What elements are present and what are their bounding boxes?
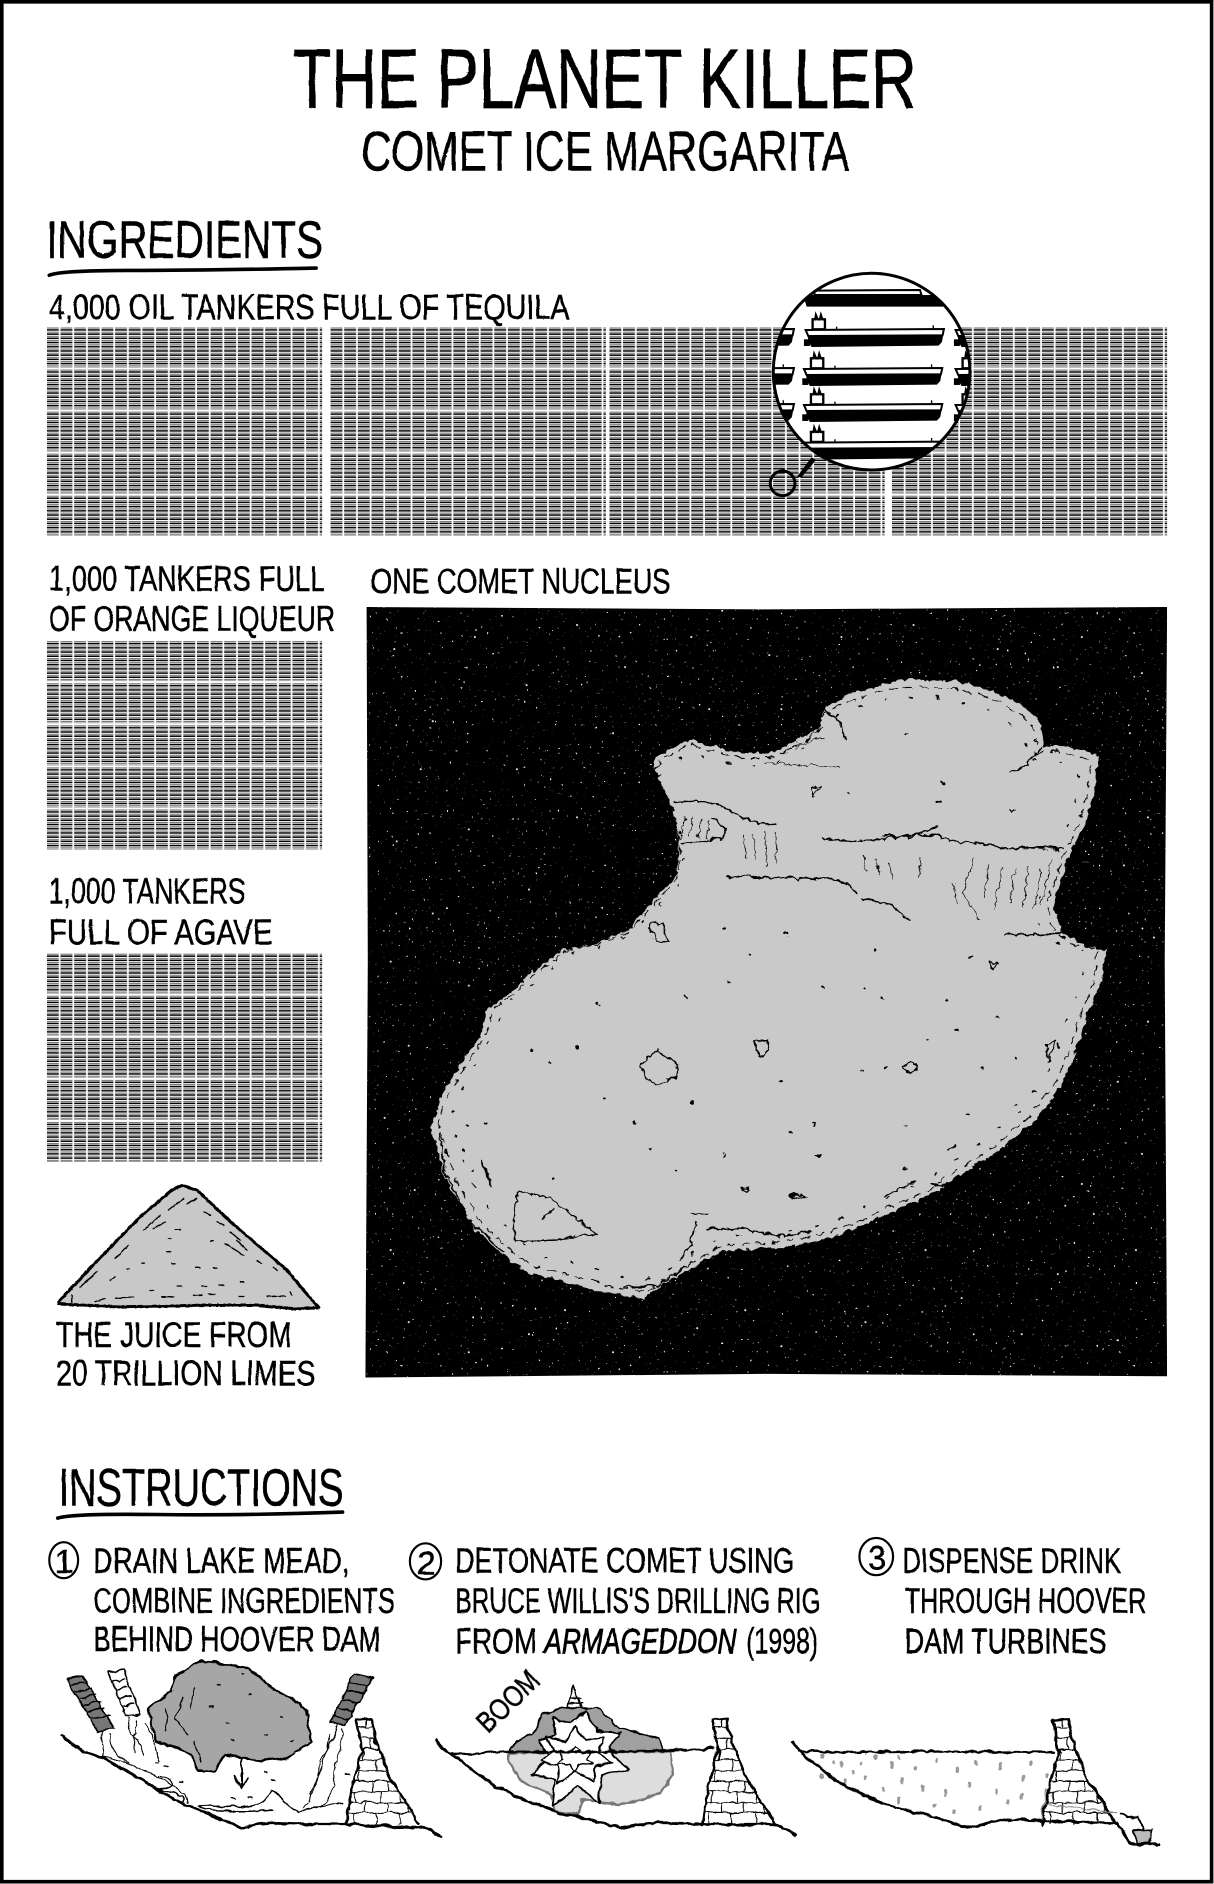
step 1 text: DRAIN LAKE MEAD, [93, 1541, 349, 1580]
step 1 text: BEHIND HOOVER DAM [93, 1619, 380, 1658]
falling comet [147, 1660, 310, 1770]
hoover dam [1037, 1717, 1123, 1823]
lake surface [797, 1750, 1053, 1751]
lake bed [435, 1740, 794, 1833]
lime juice pile [58, 1185, 318, 1309]
subtitle: COMET ICE MARGARITA [361, 119, 849, 181]
label: orange liqueur: 1,000 TANKERS FULL [48, 559, 325, 598]
step 3 text: DAM TURBINES [904, 1622, 1106, 1661]
panel: comet nucleus in space [361, 601, 1172, 1382]
step 2 text: DETONATE COMET USING [454, 1541, 793, 1580]
tanker grid: agave [47, 953, 322, 1162]
water streams [100, 1717, 341, 1808]
step 1 number: 1 [55, 1543, 73, 1579]
submerged comet [507, 1750, 672, 1813]
arrow [235, 1757, 246, 1787]
hoover dam [341, 1717, 426, 1823]
neck striations [679, 726, 1050, 917]
lens [772, 272, 972, 472]
step 2 text: FROM [454, 1622, 536, 1661]
drilling rig [565, 1685, 581, 1707]
heading: instructions: INSTRUCTIONS [58, 1458, 343, 1517]
label: agave [48, 872, 272, 952]
magnifier callout [768, 272, 972, 498]
step 3 number: 3 [867, 1540, 885, 1576]
label: agave: 1,000 TANKERS [48, 872, 245, 911]
middle pipe [108, 1668, 139, 1715]
title: THE PLANET KILLER [292, 31, 916, 125]
tanker grid: orange liqueur [47, 641, 322, 849]
water line [447, 1748, 712, 1753]
step 1 number [49, 1542, 78, 1579]
surface pits [462, 734, 1015, 1177]
surface cracks [438, 706, 1103, 1285]
left pipe [66, 1675, 112, 1730]
comet body [428, 677, 1105, 1298]
hoover dam [697, 1717, 782, 1823]
label: tequila: 4,000 OIL TANKERS FULL OF TEQUILA [48, 288, 569, 327]
water pool [155, 1762, 348, 1810]
illustration: comet detonation [435, 1685, 794, 1833]
label: lime juice: 20 TRILLION LIMES [55, 1354, 315, 1393]
label: lime juice [55, 1315, 315, 1393]
illustration: dispensing drink [791, 1717, 1157, 1843]
step 2 text: BRUCE WILLIS'S DRILLING RIG [454, 1581, 820, 1620]
lake bed [791, 1742, 1157, 1843]
step 1 text [49, 1541, 394, 1658]
illustration: draining lake and adding comet [62, 1660, 440, 1835]
step 1 text: COMBINE INGREDIENTS [93, 1581, 394, 1620]
step 2 text: (1998) [745, 1622, 817, 1661]
label: comet nucleus: ONE COMET NUCLEUS [370, 562, 670, 601]
explosion [530, 1709, 627, 1805]
step 2 text: ARMAGEDDON [542, 1622, 736, 1661]
space background [361, 601, 1172, 1382]
step 3 number [859, 1538, 893, 1576]
right pipe [329, 1673, 372, 1723]
label: orange liqueur: OF ORANGE LIQUEUR [48, 599, 334, 638]
glass [1132, 1828, 1150, 1842]
heading: ingredients: INGREDIENTS [46, 210, 322, 269]
turbine flow [1041, 1787, 1115, 1817]
step 3 text: DISPENSE DRINK [901, 1541, 1120, 1580]
boom lettering: BOOM [469, 1664, 545, 1740]
step 2 number [410, 1543, 441, 1580]
step 2 number: 2 [416, 1544, 435, 1580]
comet above water [507, 1707, 662, 1751]
label: orange liqueur [48, 559, 334, 638]
drink stream [1119, 1812, 1142, 1828]
margarita speckle [821, 1753, 1045, 1812]
tanker grid: tequila [47, 327, 1167, 536]
label: agave: FULL OF AGAVE [48, 913, 272, 952]
magnifier pointer [797, 457, 816, 477]
surface craters [480, 785, 1053, 1240]
magnified spot [770, 471, 795, 496]
lake bed [62, 1735, 440, 1835]
step 3 text [859, 1538, 1145, 1661]
step 2 text [410, 1541, 820, 1661]
label: lime juice: THE JUICE FROM [55, 1315, 291, 1354]
